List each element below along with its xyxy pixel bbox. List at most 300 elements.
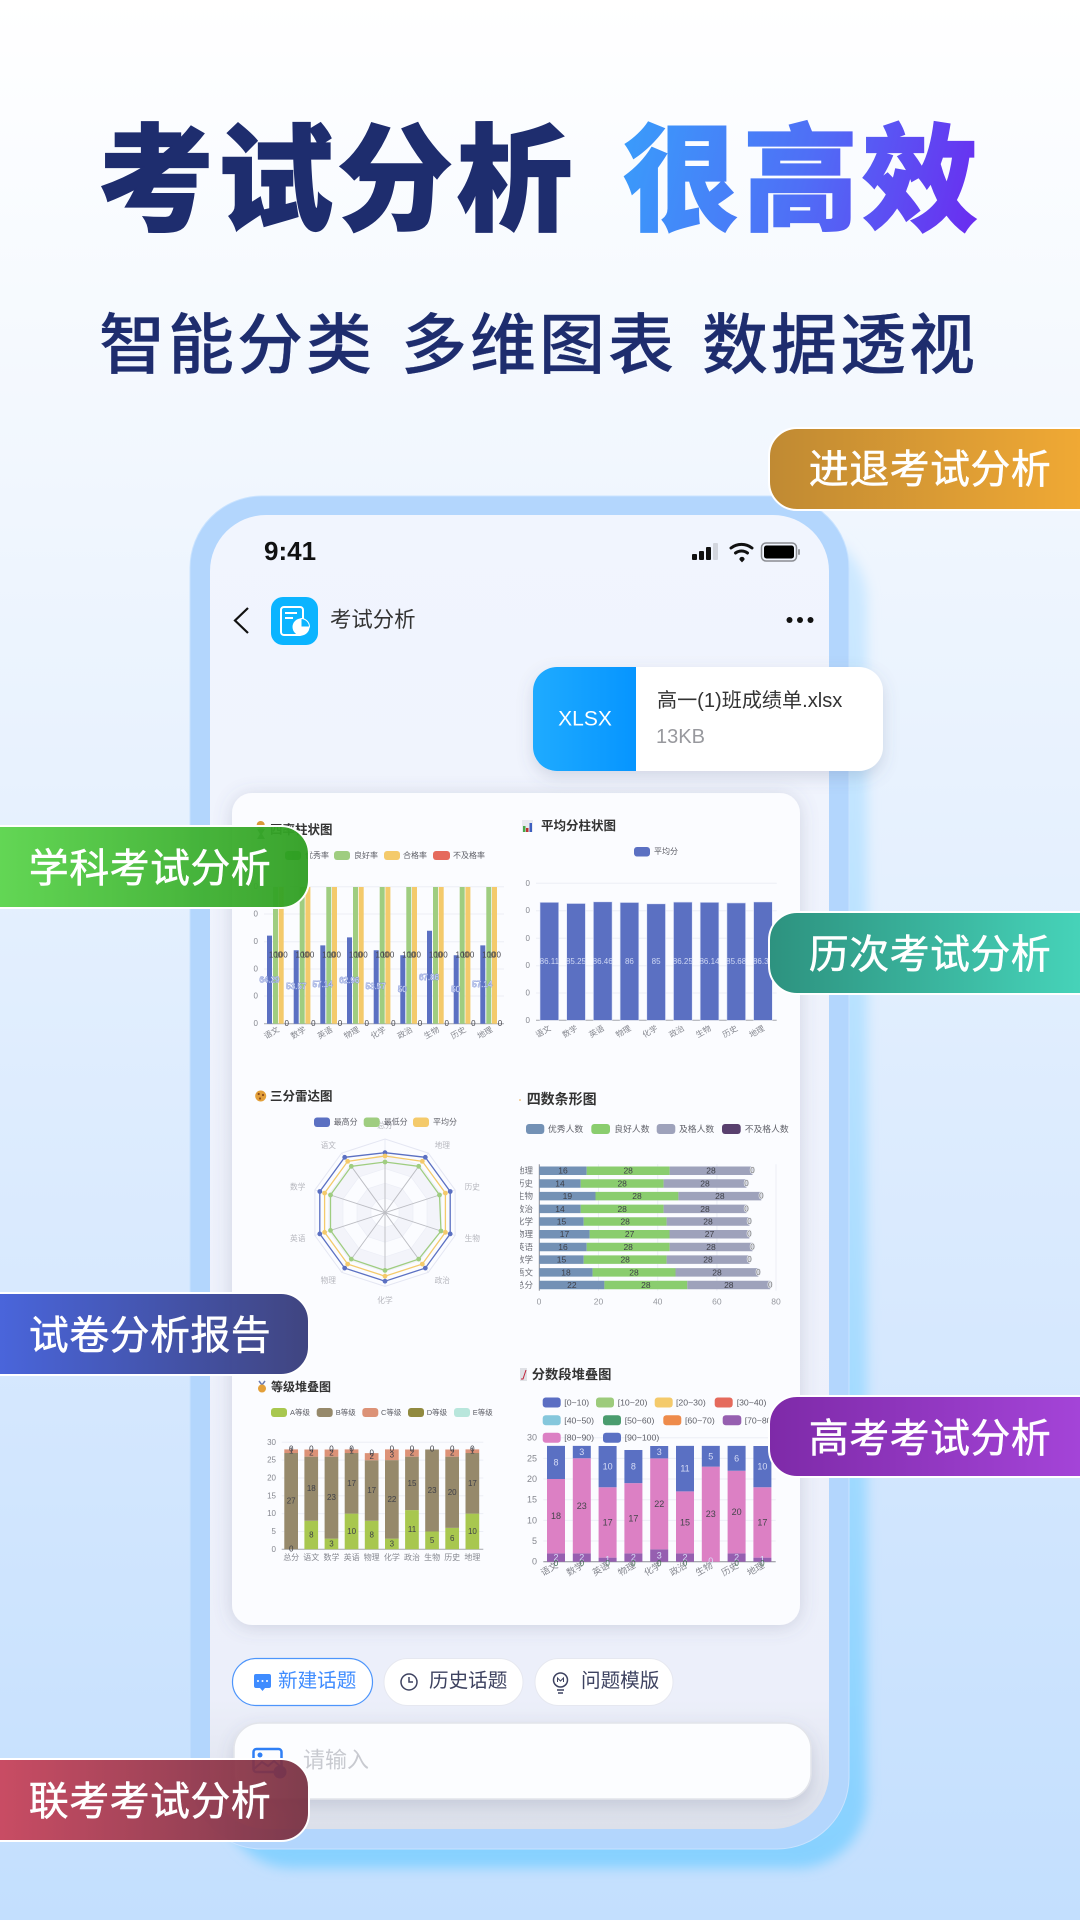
wifi icon [731, 544, 752, 560]
back arrow [235, 608, 248, 633]
category labels: 英语 [516, 1242, 533, 1252]
value labels: 11 [680, 1464, 690, 1474]
badge: 历次考试分析 [769, 912, 1080, 994]
category labels: 化学 [384, 1552, 400, 1562]
value labels: 3 [579, 1447, 584, 1457]
chart: 分数段堆叠图 [520, 1366, 776, 1578]
value labels: 20 [448, 1488, 457, 1497]
value labels: 100 [461, 950, 475, 960]
title: 考试分析 [98, 116, 576, 246]
grid and axis: 0 [526, 906, 531, 915]
value labels: 0 [338, 1019, 343, 1028]
value labels: 0 [708, 1556, 713, 1566]
value labels: 2 [410, 1448, 415, 1458]
chart: 四数条形图: 四数条形图 [527, 1091, 597, 1107]
value labels: 5 [708, 1451, 713, 1461]
bars [540, 902, 772, 1020]
value labels [540, 957, 774, 966]
chart: 分数段堆叠图: 23 [706, 1509, 716, 1519]
grid and axis: 5 [272, 1527, 277, 1536]
legend: 合格率 [403, 850, 427, 860]
legend: [30~40) [737, 1398, 767, 1408]
category labels: 英语 [315, 1024, 334, 1041]
value labels: 0 [329, 1444, 334, 1454]
value labels: 100 [301, 950, 315, 960]
category labels: 生物 [516, 1191, 533, 1201]
value labels: 10 [603, 1462, 613, 1472]
legend: [20~30) [676, 1398, 706, 1408]
value labels: 10 [757, 1462, 767, 1472]
value labels [555, 1166, 734, 1290]
value labels: 8 [309, 1530, 314, 1540]
chart: 三分雷达图 [255, 1089, 480, 1305]
legend: 不及格人数 [745, 1123, 789, 1134]
value labels: 14 [555, 1178, 565, 1188]
legend [634, 846, 678, 856]
battery icon [762, 543, 800, 561]
subtitle: 数据透视 [702, 308, 978, 382]
value labels: 100 [269, 950, 283, 960]
chart: 分数段堆叠图: 17 [757, 1518, 767, 1528]
value labels: 8 [369, 1530, 374, 1540]
value labels: 15 [557, 1216, 566, 1226]
value labels: 85.68 [726, 957, 747, 966]
grid and axis [537, 1164, 781, 1307]
value labels: 0 [391, 1019, 396, 1028]
chart: 分数段堆叠图: 0 [760, 1559, 765, 1568]
value labels [287, 1444, 477, 1554]
radar labels: 历史 [465, 1182, 480, 1192]
value labels: 28 [703, 1255, 713, 1265]
chart: 三分雷达图: 三分雷达图 [270, 1089, 333, 1104]
category labels: 英语 [344, 1552, 360, 1562]
navigation bar [235, 597, 814, 645]
badge: 联考考试分析: 联考考试分析 [29, 1780, 271, 1824]
icon: chat bubble [254, 1674, 271, 1691]
tab: 新建话题 [232, 1658, 372, 1706]
more dots [786, 617, 814, 623]
radar labels: 化学 [377, 1295, 393, 1305]
value labels: 86.25 [673, 957, 693, 966]
value labels: 28 [724, 1280, 734, 1290]
value labels: 22 [567, 1280, 577, 1290]
value labels: 27 [705, 1229, 714, 1239]
category labels: 历史 [719, 1559, 740, 1578]
radar labels: 语文 [321, 1140, 336, 1150]
value labels: 100 [408, 950, 422, 960]
chart: 分数段堆叠图: 17 [628, 1513, 638, 1523]
value labels: 8 [553, 1458, 559, 1468]
input box: 请输入 [303, 1748, 369, 1772]
badge: 学科考试分析: 学科考试分析 [29, 847, 271, 891]
category labels: 政治 [667, 1023, 686, 1040]
value labels: 28 [620, 1216, 630, 1226]
value labels: 28 [712, 1267, 722, 1277]
legend: B等级 [336, 1407, 356, 1417]
value labels: 19 [563, 1191, 572, 1201]
category labels: 数学 [516, 1255, 533, 1265]
value labels: 28 [706, 1242, 716, 1252]
value labels: 6 [734, 1453, 739, 1463]
category labels: 语文 [534, 1023, 552, 1040]
radar labels: 总分 [377, 1120, 393, 1130]
category labels: 物理 [516, 1229, 533, 1239]
category labels [520, 1166, 533, 1289]
value labels: 28 [629, 1267, 639, 1277]
value labels: 18 [561, 1267, 571, 1277]
value labels: 10 [347, 1527, 357, 1536]
tab: 历史话题: 历史话题 [429, 1670, 507, 1692]
value labels: 8 [631, 1462, 636, 1472]
screen title: 考试分析 [330, 608, 416, 632]
value labels: 100 [434, 950, 448, 960]
value labels: 86.46 [593, 957, 613, 966]
value labels: 86 [625, 957, 634, 966]
grid and axis [526, 879, 777, 1025]
category labels: 数学 [289, 1024, 308, 1041]
value labels: 100 [488, 950, 502, 960]
badge: 学科考试分析 [0, 826, 309, 908]
value labels: 86.11 [540, 957, 560, 966]
value labels: 1 [760, 1555, 765, 1565]
legend: A等级 [290, 1407, 311, 1417]
value labels: 16 [558, 1242, 568, 1252]
category labels: 地理 [745, 1559, 766, 1578]
app icon [271, 597, 318, 645]
category labels: 总分 [516, 1280, 533, 1290]
category labels: 物理 [614, 1023, 633, 1040]
value labels: 62.96 [339, 976, 360, 985]
category labels: 政治 [404, 1552, 420, 1562]
grid and axis: 0 [526, 961, 531, 970]
category labels: 地理 [516, 1166, 533, 1176]
value labels: 0 [364, 1019, 369, 1028]
category labels [283, 1552, 480, 1562]
subtitle: 多维图表 [401, 308, 677, 382]
value labels: 0 [369, 1448, 374, 1458]
chart: 四数条形图: 0 [747, 1230, 752, 1239]
value labels: 28 [715, 1191, 725, 1201]
value labels: 100 [482, 950, 496, 960]
bars [304, 1510, 479, 1549]
chart: 分数段堆叠图: 0 [554, 1559, 559, 1568]
chart panel [232, 793, 800, 1625]
chart: 分数段堆叠图: 0 [657, 1559, 662, 1568]
badge: 历次考试分析: 历次考试分析 [809, 933, 1051, 977]
value labels: 1 [470, 1447, 475, 1456]
value labels: 100 [376, 950, 389, 960]
tab: 新建话题: 新建话题 [278, 1670, 356, 1692]
value labels: 28 [620, 1255, 630, 1265]
chart: 平均分柱状图: 平均分柱状图 [541, 818, 616, 833]
category labels: 数学 [560, 1023, 579, 1040]
grid and axis: 0 [537, 1297, 542, 1307]
grid and axis: 0 [526, 1016, 531, 1025]
value labels: 100 [349, 950, 363, 960]
category labels: 物理 [364, 1552, 380, 1562]
chart: 四数条形图: 0 [759, 1192, 764, 1201]
value labels: 23 [428, 1486, 437, 1495]
grid and axis: 0 [254, 882, 259, 891]
chart: 四数条形图 [516, 1091, 789, 1307]
chart: 平均分柱状图 [522, 818, 777, 1040]
category labels: 英语 [587, 1023, 606, 1040]
value labels: 6 [450, 1534, 455, 1543]
tab: 历史话题 [384, 1658, 523, 1706]
value labels: 0 [444, 1019, 449, 1028]
value labels: 100 [354, 950, 368, 960]
grid and axis: 80 [771, 1297, 781, 1307]
grid and axis: 0 [254, 937, 259, 946]
category labels: 生物 [694, 1023, 713, 1040]
value labels: 57.14 [313, 980, 333, 989]
category labels [262, 1024, 494, 1041]
value labels: 10 [468, 1527, 477, 1536]
value labels: 17 [347, 1479, 357, 1488]
chart: 分数段堆叠图: 分数段堆叠图 [532, 1366, 611, 1382]
value labels: 0 [410, 1444, 415, 1454]
grid and axis: 20 [527, 1474, 537, 1484]
chart icon [258, 1381, 266, 1392]
value labels: 3 [657, 1550, 662, 1560]
value labels: 100 [322, 950, 336, 960]
category labels [534, 1023, 766, 1040]
category labels: 英语 [590, 1559, 611, 1578]
chart: 分数段堆叠图: 23 [577, 1501, 587, 1511]
phone mockup [190, 496, 883, 1868]
value labels: 100 [274, 950, 288, 960]
value labels: 3 [329, 1540, 334, 1548]
category labels: 历史 [721, 1023, 739, 1040]
chart icon [255, 1090, 266, 1102]
value labels: 28 [700, 1204, 710, 1214]
value labels: 1 [289, 1447, 294, 1456]
legend: [50~60) [625, 1415, 655, 1425]
subtitle [99, 308, 978, 382]
file type tag: XLSX [558, 708, 612, 730]
legend: 平均分 [433, 1116, 457, 1126]
chart: 四率柱状图 [254, 821, 504, 1041]
chart icon [520, 1368, 527, 1381]
title [98, 116, 982, 246]
clock: 9:41 [264, 536, 316, 566]
category labels: 生物 [424, 1552, 440, 1562]
category labels: 生物 [422, 1024, 441, 1041]
category labels: 地理 [475, 1024, 494, 1041]
value labels: 15 [557, 1255, 566, 1265]
value labels: 15 [408, 1479, 417, 1488]
legend: 良好率 [354, 850, 378, 860]
value labels: 64.29 [259, 976, 280, 984]
grid and axis: 25 [527, 1453, 537, 1463]
legend: [40~50) [564, 1415, 594, 1425]
value labels: 100 [456, 950, 469, 960]
category labels: 数学 [324, 1552, 340, 1562]
legend: E等级 [473, 1407, 493, 1417]
grid and axis: 20 [267, 1474, 277, 1482]
icon: light bulb [554, 1673, 568, 1693]
radar labels: 政治 [435, 1275, 450, 1285]
badge: 试卷分析报告: 试卷分析报告 [29, 1314, 271, 1358]
legend: [0~10) [564, 1398, 589, 1408]
value labels: 28 [623, 1166, 633, 1176]
legend: C等级 [381, 1407, 402, 1417]
value labels: 28 [632, 1191, 642, 1201]
value labels: 17 [560, 1229, 569, 1239]
badge: 高考考试分析 [769, 1396, 1080, 1477]
badge: 进退考试分析 [769, 428, 1080, 510]
grid and axis: 0 [254, 910, 259, 918]
grid and axis: 0 [526, 879, 531, 888]
value labels: 53.57 [366, 982, 386, 991]
legend [526, 1123, 789, 1134]
radar labels [290, 1120, 480, 1305]
title: 很高效 [623, 116, 982, 246]
value labels [259, 950, 503, 1028]
chart: 分数段堆叠图: 15 [680, 1517, 690, 1527]
value labels: 3 [390, 1450, 395, 1459]
chart: 四数条形图: 0 [744, 1179, 749, 1188]
file size: 13KB [656, 726, 705, 748]
category labels: 政治 [516, 1204, 533, 1214]
value labels: 3 [390, 1540, 395, 1548]
category labels: 化学 [369, 1024, 388, 1041]
bars [547, 1549, 771, 1562]
category labels: 语文 [303, 1552, 319, 1562]
chart: 分数段堆叠图: 0 [605, 1559, 610, 1568]
grid and axis: 40 [653, 1297, 663, 1307]
value labels: 18 [307, 1484, 316, 1493]
category labels: 语文 [516, 1267, 533, 1277]
category labels: 政治 [667, 1559, 689, 1578]
value labels: 27 [287, 1497, 296, 1506]
file name: 高一(1)班成绩单.xlsx [657, 689, 842, 712]
chart: 分数段堆叠图: 18 [551, 1511, 561, 1521]
category labels: 物理 [342, 1024, 361, 1041]
grid and axis: 0 [254, 1019, 259, 1028]
value labels: 22 [387, 1495, 397, 1504]
chart: 分数段堆叠图: 0 [631, 1559, 636, 1568]
radar labels: 生物 [465, 1233, 480, 1243]
chart: 四数条形图: 0 [747, 1217, 752, 1226]
value labels: 0 [309, 1444, 314, 1454]
chart: 分数段堆叠图: 0 [683, 1559, 688, 1568]
value labels: 0 [349, 1444, 354, 1454]
value labels: 85.25 [566, 957, 587, 966]
category labels: 地理 [747, 1023, 766, 1040]
category labels: 化学 [642, 1559, 663, 1578]
grid and axis: 0 [272, 1545, 277, 1554]
grid and axis: 0 [526, 934, 531, 943]
grid and axis: 10 [527, 1515, 537, 1525]
phone glow shadow [222, 530, 867, 1868]
value labels: 50 [398, 985, 407, 994]
chart: 分数段堆叠图: 0 [580, 1559, 585, 1568]
grid and axis: 30 [267, 1438, 277, 1447]
chart: 等级堆叠图 [258, 1379, 493, 1562]
value labels: 2 [734, 1552, 739, 1562]
category labels: 政治 [395, 1024, 414, 1041]
value labels: 0 [418, 1019, 423, 1028]
file type tag [533, 667, 636, 771]
legend: D等级 [427, 1407, 448, 1417]
grid and axis: 10 [267, 1509, 277, 1518]
chart: 分数段堆叠图: 0 [734, 1559, 739, 1568]
category labels: 语文 [538, 1559, 560, 1578]
icon: clock [401, 1674, 417, 1690]
category labels: 语文 [262, 1024, 281, 1041]
value labels: 100 [328, 950, 342, 960]
chart: 分数段堆叠图: 20 [732, 1507, 742, 1517]
chart: 四数条形图: 0 [747, 1255, 752, 1264]
category labels: 地理 [464, 1552, 480, 1562]
value labels: 100 [402, 950, 416, 960]
legend: [80~90) [564, 1433, 594, 1443]
badge: 高考考试分析: 高考考试分析 [809, 1417, 1051, 1461]
chart: 四数条形图: 0 [750, 1166, 755, 1175]
grid and axis: 25 [267, 1456, 277, 1465]
value labels: 11 [408, 1525, 417, 1534]
value labels: 28 [706, 1166, 716, 1176]
chart: 四率柱状图: 四率柱状图 [270, 822, 333, 837]
value labels: 2 [631, 1552, 636, 1562]
grid and axis [527, 1433, 776, 1567]
legend: [90~100) [625, 1433, 659, 1443]
legend: 最低分 [384, 1116, 408, 1126]
value labels: 28 [703, 1216, 713, 1226]
phone screen [210, 515, 829, 1829]
value labels: 2 [309, 1448, 314, 1458]
value labels: 57.14 [472, 980, 493, 989]
value labels: 0 [498, 1019, 503, 1028]
value labels: 86.14 [699, 957, 720, 966]
category labels: 化学 [516, 1216, 533, 1226]
category labels: 历史 [516, 1178, 533, 1188]
value labels: 17 [468, 1479, 477, 1488]
value labels: 0 [390, 1444, 395, 1454]
chart: 等级堆叠图: 等级堆叠图 [271, 1379, 331, 1394]
bars [539, 1166, 604, 1289]
legend: 不及格率 [453, 850, 485, 860]
value labels: 0 [311, 1019, 316, 1028]
value labels: 28 [617, 1204, 627, 1214]
value labels: 100 [381, 950, 395, 960]
value labels: 100 [429, 950, 443, 960]
value labels: 17 [367, 1486, 377, 1495]
grid and axis: 60 [712, 1297, 722, 1307]
value labels: 67.86 [419, 973, 440, 982]
legend [314, 1116, 457, 1127]
tab: 问题模版: 问题模版 [581, 1670, 659, 1692]
grid and axis: 15 [267, 1491, 277, 1500]
value labels: 1 [605, 1555, 610, 1565]
value labels: 16 [558, 1166, 568, 1176]
value labels: 0 [430, 1444, 435, 1454]
legend: [60~70) [685, 1415, 715, 1425]
value labels: 3 [657, 1447, 662, 1457]
chart icon [257, 821, 265, 839]
legend [271, 1407, 493, 1417]
grid and axis [254, 882, 504, 1028]
icon: add image [254, 1749, 286, 1778]
category labels: 历史 [444, 1552, 460, 1562]
radar labels: 地理 [435, 1140, 450, 1150]
grid and axis [267, 1438, 483, 1554]
grid and axis: 0 [254, 992, 259, 1000]
bars [267, 931, 485, 1024]
status bar [264, 536, 800, 566]
value labels: 2 [369, 1452, 374, 1461]
